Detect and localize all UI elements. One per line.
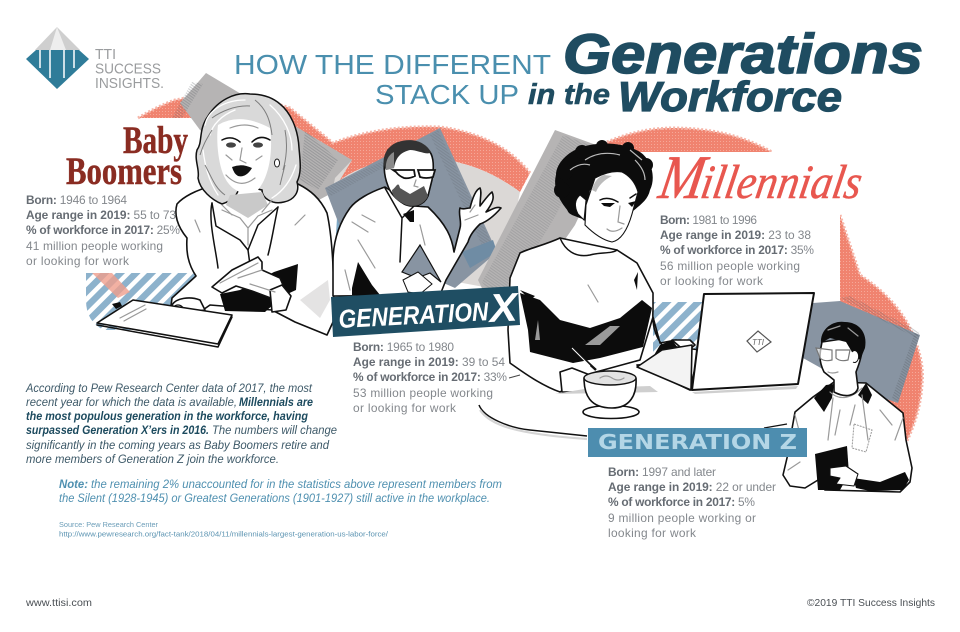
- stats: Millennials: % of workforce in 2017: 35%: [660, 243, 814, 257]
- stats: Generation X: 53 million people working: [353, 386, 493, 400]
- heading: Baby Boomers: [66, 119, 188, 193]
- logo: TTI Success Insights: TTI: [95, 47, 116, 63]
- banner: Generation Z: GENERATION Z: [598, 430, 797, 454]
- stats: Generation Z: looking for work: [608, 526, 696, 540]
- source: [59, 520, 389, 538]
- stats: Generation Z: % of workforce in 2017: 5%: [608, 495, 755, 509]
- source: http://www.pewresearch.org/fact-tank/2018/04/11/millennials-largest-generation-us-labor-force/: [59, 530, 389, 538]
- background: coral wave behind Baby Boomers and Generation X: [138, 96, 530, 290]
- stats: Millennials: Born: 1981 to 1996: [660, 213, 757, 227]
- title: Generations: [563, 22, 923, 85]
- text block: Pew Research summary: the most populous generation in the workforce, having: [26, 410, 308, 423]
- note: the remaining 2% unaccounted for in the statistics above represent members from: [91, 478, 502, 491]
- background: slate paper shape behind Generation X: [325, 128, 497, 288]
- background: blue striped panel by laptop: [653, 302, 705, 354]
- illustration: coffee cup and saucer on notebook: [555, 371, 658, 418]
- banner: Generation X: GENERATION: [338, 296, 490, 334]
- stats: Baby Boomers: Age range in 2019: 55 to 73: [26, 208, 176, 222]
- title: Workforce: [618, 73, 842, 120]
- heading: Millennials: M: [654, 142, 713, 212]
- banner: Generation Z: [588, 428, 807, 457]
- stats: Generation Z: Born: 1997 and later: [608, 465, 716, 479]
- heading: Baby Boomers: Boomers: [66, 150, 182, 193]
- illustration: laptop: TTI: [752, 338, 765, 347]
- footer: copyright: ©2019 TTI Success Insights: [807, 597, 935, 609]
- stats: Millennials: or looking for work: [660, 274, 763, 288]
- banner: Generation X: X: [486, 285, 521, 331]
- stats: Generation Z: Age range in 2019: 22 or under: [608, 480, 776, 494]
- stats: Generation X: Born: 1965 to 1980: [353, 340, 454, 354]
- footer: website: www.ttisi.com: [25, 597, 92, 609]
- text block: Pew Research summary: The numbers will change: [212, 424, 338, 437]
- illustration: Generation X man: [333, 187, 501, 296]
- text block: Pew Research summary: recent year for which the data is available,: [26, 396, 237, 409]
- note: the Silent (1928-1945) or Greatest Generations (1901-1927) still active in the workplace.: [59, 492, 490, 505]
- background: slate paper shape behind Generation Z: [803, 296, 920, 403]
- stats: Generation Z: [608, 465, 776, 540]
- banner: Generation X: [331, 285, 521, 337]
- text block: Pew Research summary: According to Pew Research Center data of 2017, the most: [25, 382, 313, 395]
- illustration: Baby Boomer hair and face: [196, 94, 300, 218]
- logo: TTI Success Insights: SUCCESS: [95, 62, 161, 78]
- illustration: Generation Z head: [816, 322, 866, 395]
- stats: Generation X: Age range in 2019: 39 to 54: [353, 355, 505, 369]
- stats: Generation X: or looking for work: [353, 401, 456, 415]
- stats: Baby Boomers: [26, 193, 180, 268]
- logo: TTI Success Insights: [26, 27, 164, 92]
- source: Source: Pew Research Center: [59, 520, 159, 529]
- text block: Pew Research summary: [25, 382, 338, 466]
- illustration: Baby Boomer woman: [170, 184, 334, 335]
- illustration: Millennial woman hair and face: [554, 140, 653, 242]
- title: STACK UP: [375, 79, 519, 110]
- stats: Millennials: [660, 213, 814, 288]
- stats: Millennials: Age range in 2019: 23 to 38: [660, 228, 811, 242]
- background: coral wave behind Millennials and Generation Z: [600, 128, 922, 445]
- heading: Baby Boomers: Baby: [123, 119, 188, 162]
- logo: TTI Success Insights: INSIGHTS.: [95, 76, 164, 92]
- stats: Baby Boomers: 41 million people working: [26, 239, 163, 253]
- text block: Pew Research summary: surpassed Generation X’ers in 2016.: [26, 424, 209, 437]
- icon: clipboard: [97, 300, 232, 347]
- stats: Generation X: % of workforce in 2017: 33%: [353, 370, 507, 384]
- note: [59, 478, 502, 505]
- stats: Millennials: 56 million people working: [660, 259, 800, 273]
- table edge line: [479, 375, 787, 439]
- background: gray paper shape behind Baby Boomer: [172, 73, 352, 210]
- background: gray paper shape behind Millennial: [478, 130, 610, 305]
- stats: Generation X: [353, 340, 507, 415]
- stats: Generation Z: 9 million people working or: [608, 511, 756, 525]
- text block: Pew Research summary: more members of Generation Z join the workforce.: [26, 453, 279, 466]
- illustration: Millennial woman body: [508, 238, 700, 392]
- heading: Millennials: illennials: [697, 156, 866, 209]
- illustration: Generation X head: [384, 140, 435, 206]
- title: in the: [528, 79, 610, 111]
- note: Note:: [59, 478, 88, 491]
- background: blue striped panel by clipboard: [86, 273, 195, 330]
- illustration: Generation Z man: [783, 382, 912, 492]
- text block: Pew Research summary: Millennials are: [239, 396, 314, 409]
- stats: Baby Boomers: % of workforce in 2017: 25%: [26, 223, 180, 237]
- illustration: laptop: [637, 293, 814, 394]
- stats: Baby Boomers: Born: 1946 to 1964: [26, 193, 127, 207]
- title: [234, 22, 923, 120]
- stats: Baby Boomers: or looking for work: [26, 254, 129, 268]
- title: HOW THE DIFFERENT: [234, 49, 551, 80]
- text block: Pew Research summary: significantly in the coming years as Baby Boomers retire and: [26, 439, 330, 452]
- heading: Millennials: [654, 142, 869, 212]
